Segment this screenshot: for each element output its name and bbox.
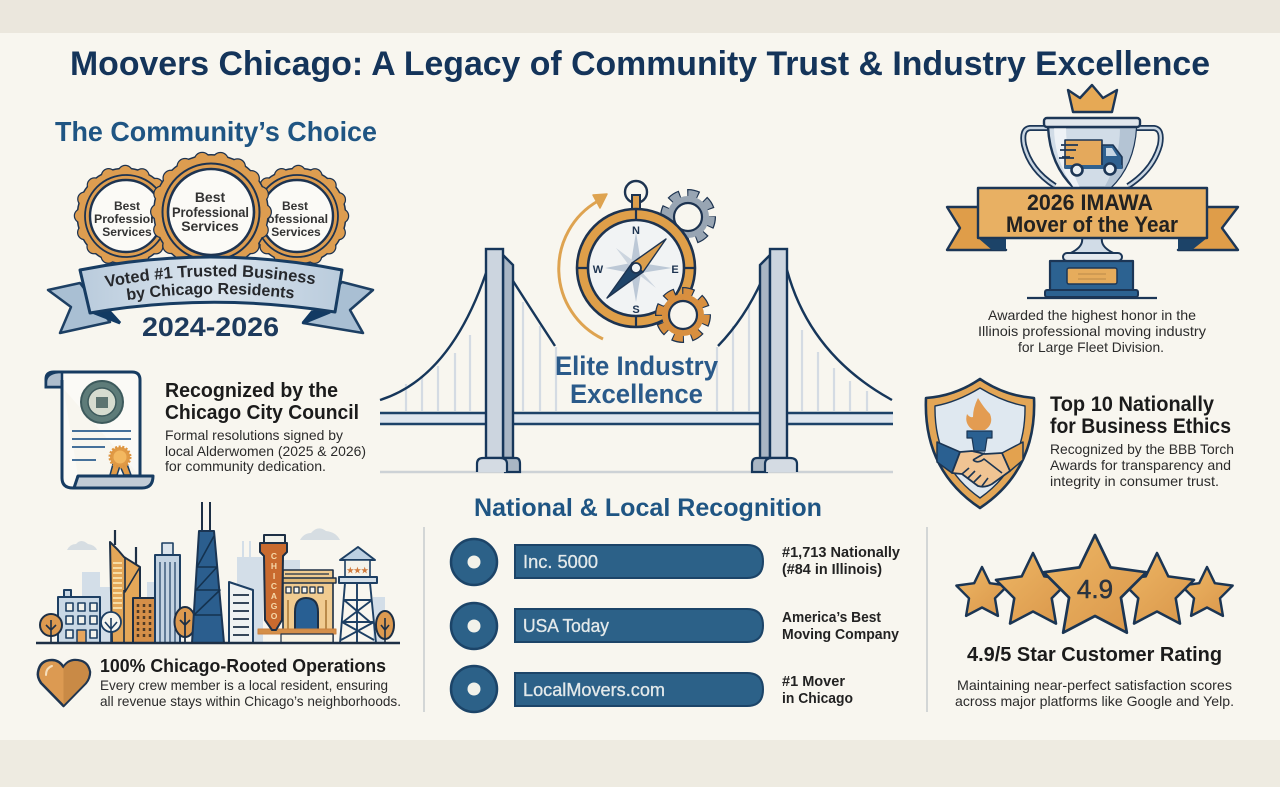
- text: business ethics: Top 10 Nationally: [1050, 393, 1214, 416]
- icon: compass: N: [632, 225, 640, 237]
- badge: right: Services: [271, 225, 321, 239]
- ribbon: voted #1: [46, 256, 374, 334]
- text: star rating: Maintaining near-perfect satisfaction scores: [957, 677, 1232, 693]
- building: hancock tower: [192, 502, 224, 643]
- building: theatre: [258, 570, 336, 643]
- text: city council: local Alderwomen (2025 & 2026): [165, 443, 366, 459]
- text: award description: [978, 307, 1206, 355]
- icon: trophy: [1023, 85, 1161, 298]
- text: business ethics: Recognized by the BBB Torch: [1050, 441, 1234, 457]
- icon: orange gear: [661, 293, 705, 337]
- heading: elite industry excellence: Elite Industry: [555, 351, 718, 381]
- icon: heart: [38, 660, 90, 706]
- icon: shield with torch and handshake: [926, 379, 1034, 508]
- ribbon: voted #1: Voted #1 Trusted Business: [104, 264, 315, 286]
- illustration: chicago skyline: [36, 502, 400, 643]
- text: chicago rooted: 100% Chicago-Rooted Operations: [100, 656, 386, 676]
- tree: [376, 611, 394, 643]
- sign: chicago marquee: I: [273, 571, 275, 581]
- torch: [967, 431, 992, 451]
- icon: compass: S: [632, 304, 640, 316]
- illustration: suspension bridge: [380, 249, 893, 472]
- tower: left: [477, 249, 520, 472]
- row: usa today: [451, 603, 899, 649]
- badge: left: Services: [102, 225, 152, 239]
- hands: [952, 451, 1010, 487]
- row: usa today: Moving Company: [782, 627, 899, 643]
- badge: center: Professional: [172, 204, 249, 220]
- building: orange tower: [110, 530, 140, 643]
- text: star rating: 4.9/5 Star Customer Rating: [967, 644, 1222, 666]
- row: inc 5000: [451, 539, 900, 585]
- building: brown block: [133, 598, 163, 643]
- tree: [174, 607, 196, 643]
- text: city council: Recognized by the: [165, 380, 338, 402]
- row: inc 5000: (#84 in Illinois): [782, 562, 882, 578]
- building: white slanted: [229, 582, 253, 643]
- arrow: upward arc: [559, 194, 607, 339]
- text: award description: Awarded the highest honor in the: [988, 307, 1196, 323]
- text: award description: Illinois professional moving industry: [978, 323, 1206, 339]
- crown: [1068, 85, 1117, 112]
- text: chicago rooted: all revenue stays within Chicago’s neighborhoods.: [100, 693, 401, 709]
- building: apartments: [58, 590, 100, 643]
- rating stars: [956, 535, 1233, 633]
- rating stars: 4.9: [1077, 574, 1113, 604]
- text: city council: [165, 380, 366, 474]
- badge: left: Professional: [94, 212, 168, 226]
- cup: [1023, 118, 1161, 188]
- text: business ethics: for Business Ethics: [1050, 415, 1231, 438]
- text: chicago rooted: [100, 656, 401, 709]
- row: localmovers: in Chicago: [782, 691, 853, 707]
- banner: imawa: 2026 IMAWA: [1027, 190, 1153, 215]
- flame: [966, 398, 991, 430]
- row: localmovers: [451, 666, 853, 712]
- icon: compass: E: [671, 264, 679, 276]
- badge: right: Best: [282, 199, 308, 213]
- row: inc 5000: Inc. 5000: [523, 552, 598, 572]
- icon: compass: W: [593, 264, 604, 276]
- row: usa today: America’s Best: [782, 610, 881, 626]
- badge: right: [250, 168, 346, 264]
- text: star rating: across major platforms like Google and Yelp.: [955, 693, 1234, 709]
- water tower: ★★★: [347, 566, 369, 575]
- row: usa today: USA Today: [523, 616, 609, 636]
- sleeves: [937, 442, 960, 473]
- tree: [40, 614, 62, 643]
- text: chicago rooted: Every crew member is a local resident, ensuring: [100, 677, 388, 693]
- text: award description: for Large Fleet Division.: [1018, 339, 1164, 355]
- row: localmovers: LocalMovers.com: [523, 680, 665, 700]
- row: inc 5000: #1,713 Nationally: [782, 545, 900, 561]
- text: city council: Formal resolutions signed by: [165, 427, 343, 443]
- icon: grey gear: [666, 195, 710, 239]
- water tower: [339, 547, 377, 643]
- badge: left: Best: [114, 199, 140, 213]
- heading: elite industry excellence: Excellence: [570, 379, 703, 409]
- icon: scroll resolution: [46, 372, 153, 488]
- text: business ethics: [1050, 393, 1234, 489]
- ribbon: voted #1: by Chicago Residents: [126, 283, 294, 302]
- title: Moovers Chicago: A Legacy of Community Trust & Industry Excellence: [70, 45, 1210, 83]
- sign: chicago marquee: A: [271, 591, 277, 601]
- building: grey blue tower: [155, 543, 180, 643]
- badge: left: [76, 168, 174, 264]
- row: localmovers: #1 Mover: [782, 674, 845, 690]
- badge: center: Best: [195, 189, 226, 205]
- text: business ethics: Awards for transparency and: [1050, 457, 1231, 473]
- sign: chicago marquee: C: [271, 581, 277, 591]
- sign: chicago marquee: G: [271, 601, 278, 611]
- badge: center: [153, 154, 269, 270]
- banner: imawa: Mover of the Year: [1006, 212, 1178, 237]
- years: 2024-2026: [142, 312, 279, 342]
- text: city council: Chicago City Council: [165, 402, 359, 424]
- heading: national and local recognition: National & Local Recognition: [474, 494, 822, 522]
- heading: elite industry excellence: [555, 351, 718, 409]
- badge: right: Professional: [254, 212, 328, 226]
- sign: chicago marquee: O: [271, 611, 278, 621]
- badge: center: Services: [181, 218, 239, 234]
- text: city council: for community dedication.: [165, 458, 326, 474]
- sign: chicago marquee: [260, 535, 287, 630]
- tower: right: [752, 249, 797, 472]
- text: business ethics: integrity in consumer trust.: [1050, 473, 1219, 489]
- banner: imawa: [947, 188, 1238, 250]
- badge group: best professional services: [76, 154, 346, 270]
- tree: [101, 612, 121, 643]
- sign: chicago marquee: C: [271, 551, 277, 561]
- sign: chicago marquee: H: [271, 561, 277, 571]
- icon: compass: [577, 181, 695, 327]
- truck: [1059, 140, 1122, 176]
- text: star rating: [955, 644, 1234, 709]
- heading: The Community's Choice: The Community’s Choice: [55, 116, 377, 147]
